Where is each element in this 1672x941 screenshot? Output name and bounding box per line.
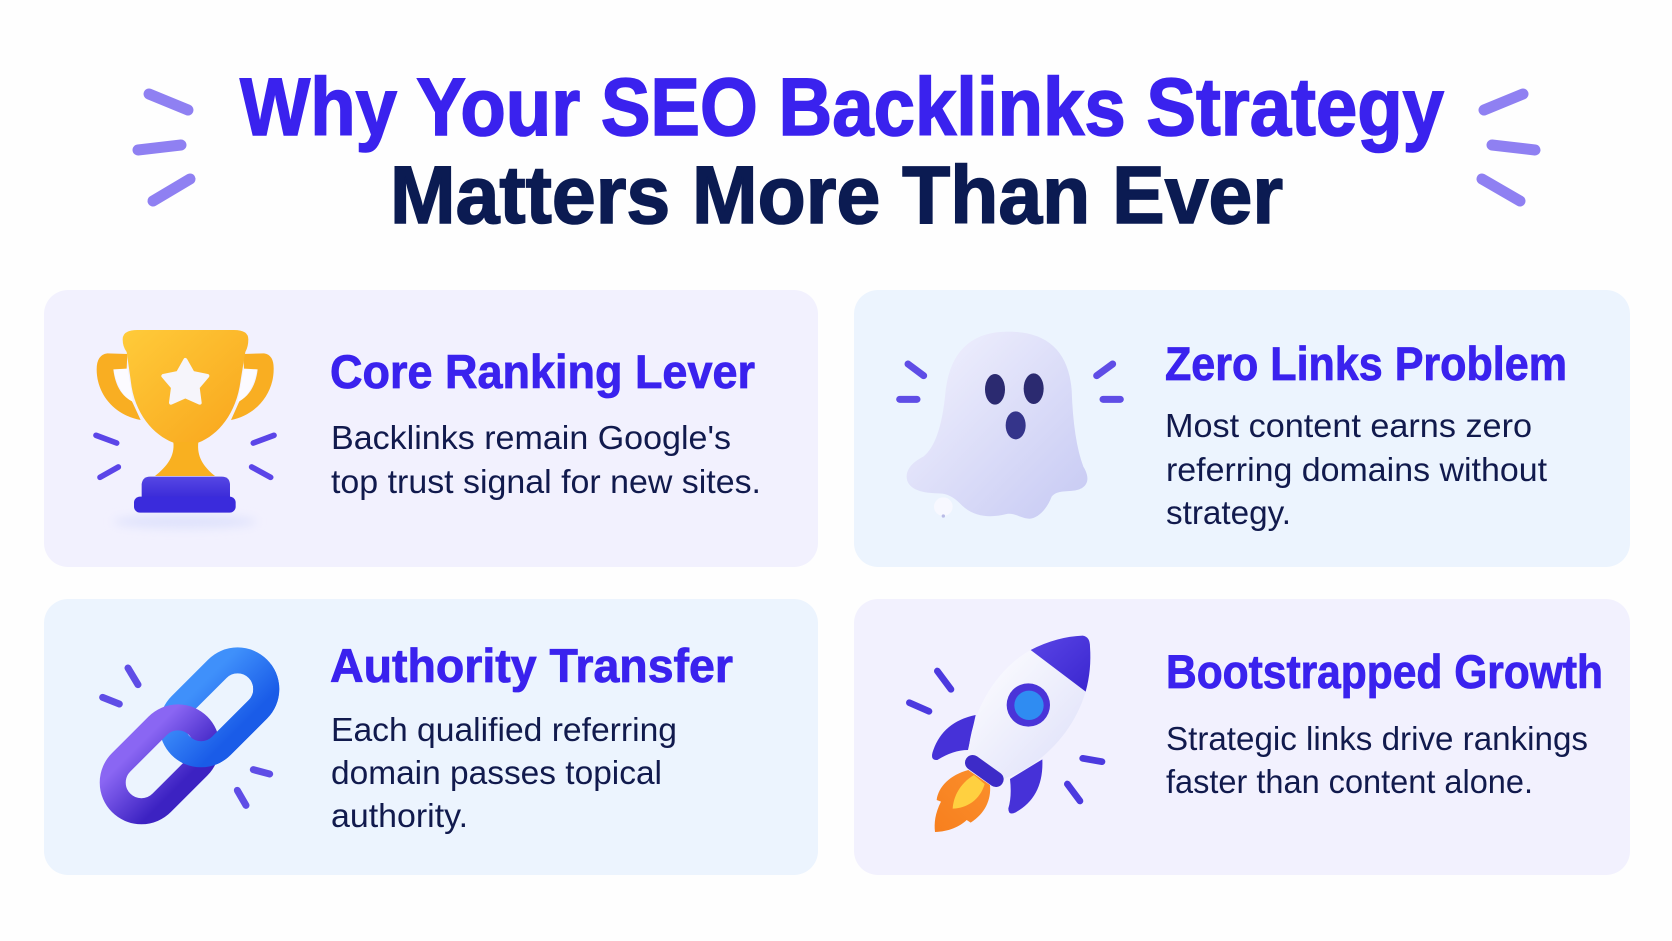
body text: Strategic links drive rankings: [1166, 720, 1588, 757]
body text: [1165, 407, 1547, 531]
panel: bootstrapped growth: [854, 599, 1630, 875]
panel background: [854, 599, 1630, 875]
body text: [1166, 720, 1588, 800]
body text: authority.: [331, 797, 468, 834]
icon: rocket: [909, 636, 1102, 832]
body text: strategy.: [1166, 494, 1291, 531]
heading: Zero Links Problem: [1165, 337, 1567, 390]
title line 1: Why Your SEO Backlinks Strategy: [240, 62, 1444, 153]
heading: Bootstrapped Growth: [1166, 645, 1603, 698]
body text: domain passes topical: [331, 754, 662, 791]
body text: Most content earns zero: [1165, 407, 1532, 444]
icon: trophy: [96, 330, 274, 528]
panel: core ranking lever: [44, 290, 818, 567]
body text: top trust signal for new sites.: [331, 463, 761, 500]
panel: authority transfer: [44, 599, 818, 875]
body text: referring domains without: [1166, 451, 1547, 488]
icon: right title sparks: [1482, 94, 1535, 201]
body text: [331, 711, 677, 834]
heading: Core Ranking Lever: [330, 345, 755, 398]
icon: left title sparks: [138, 94, 190, 201]
icon: ghost: [900, 332, 1120, 519]
panel background: [44, 599, 818, 875]
title: [240, 62, 1444, 241]
body text: faster than content alone.: [1166, 763, 1533, 800]
panel background: [854, 290, 1630, 567]
icon: chain links: [101, 649, 278, 823]
body text: Each qualified referring: [331, 711, 677, 748]
body text: [331, 419, 761, 500]
panel background: [44, 290, 818, 567]
body text: Backlinks remain Google's: [331, 419, 731, 456]
panel: zero links problem: [854, 290, 1630, 567]
title line 2: Matters More Than Ever: [390, 150, 1283, 241]
heading: Authority Transfer: [330, 639, 733, 692]
